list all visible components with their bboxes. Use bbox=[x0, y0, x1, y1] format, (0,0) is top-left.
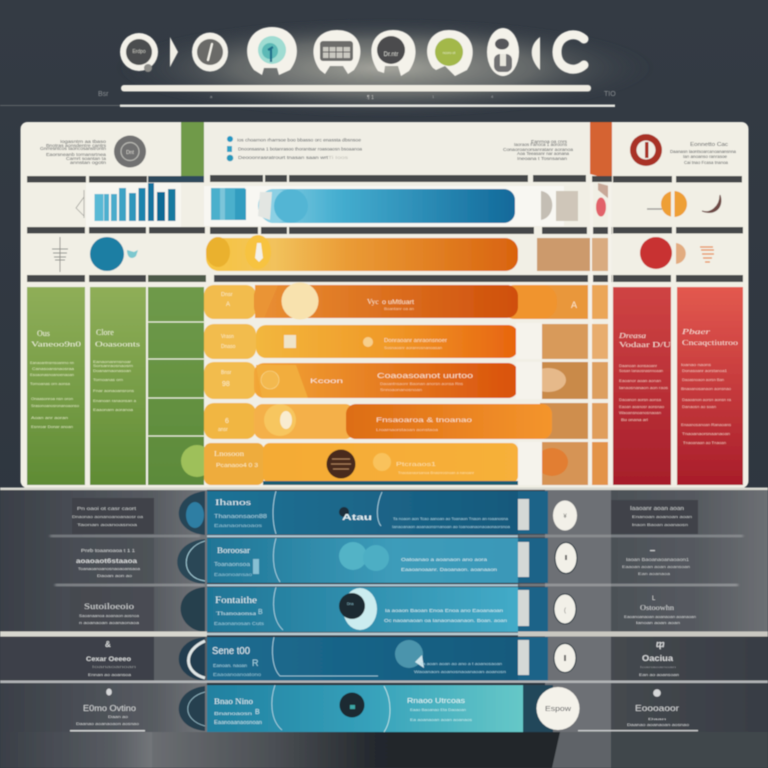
right label 4: Ean ao aoansoan bbox=[639, 672, 679, 677]
text block: upper right title with red badge: Eonnetto Cac bbox=[690, 142, 728, 148]
text block: upper right title with red badge: Cai tnao Fcasa tnanoa bbox=[684, 160, 729, 165]
left label 2: Toanaoanoanosnaoaoansaoa bbox=[78, 567, 140, 571]
left label 4: Cexar Oeeeo bbox=[86, 656, 131, 663]
green column: middle: Tornoanas orn bbox=[93, 378, 123, 382]
left label 5: Daan ao bbox=[108, 715, 128, 719]
red column: right bbox=[677, 287, 743, 485]
right label 5 bbox=[578, 689, 698, 731]
bar chart bbox=[76, 183, 181, 227]
text block: bullet list: Dnoonsasna 1 botanrasoo thorantsar roasoaosn bsoaanoa bbox=[238, 146, 362, 152]
header bars bbox=[27, 175, 743, 282]
icon: dark text badge bbox=[371, 30, 416, 76]
text block: upper right title with red badge: Daanasn Iaontsoarcanoanansnna bbox=[670, 149, 737, 154]
right label 3: Ostoowhn bbox=[640, 604, 675, 612]
blue row 1: Thanaonsaon88 bbox=[214, 514, 267, 520]
blue row 4: Waoanaon aoanosnaoanaoan aoanosn bbox=[414, 670, 506, 674]
blue row 5: Ea aoanaoan aoan aoanaos bbox=[410, 717, 472, 722]
blue row 3: B bbox=[258, 609, 263, 616]
green column: left: Aoan anr aoran bbox=[31, 416, 68, 420]
left label 3: Sutoiloeoio bbox=[84, 602, 134, 611]
icon: teal keyhole badge bbox=[247, 27, 297, 75]
green column: left bbox=[27, 287, 85, 485]
header rule with tick labels: a bbox=[210, 94, 213, 99]
icon: left dial bbox=[52, 237, 68, 272]
blue progress bar bbox=[204, 186, 564, 226]
red column: left: Bu onana arl bbox=[621, 418, 648, 422]
orange row 3: Coaoasoanot uurtoo bbox=[377, 373, 473, 380]
text block: upper left note with badge: Eaorsneanb tornansrtnea bbox=[46, 152, 107, 157]
green column: left: Eanaoantnsrnsoanrno nn bbox=[30, 361, 74, 365]
left label 5 bbox=[70, 688, 145, 732]
orange row 4: Fnsaoaroa & tnoanao bbox=[376, 418, 473, 424]
main cream panel bbox=[20, 122, 748, 488]
right label 2: Eaaoan aoan aoan aoansoan bbox=[622, 565, 690, 569]
left label 5: Daanao aoanaoaon aosnao bbox=[76, 722, 139, 726]
orange row 4: ansr bbox=[218, 427, 228, 433]
blue row 5: Eaao Baoanao Eta Daoaoan bbox=[410, 707, 466, 712]
left label 1 bbox=[72, 506, 144, 527]
right label 3 bbox=[624, 596, 696, 625]
icon: letter C ring bbox=[557, 35, 584, 69]
blue row 2: Eaaonoansao bbox=[214, 572, 253, 577]
blue row 2: Boroosar bbox=[217, 545, 250, 555]
green column: left: Esoaonasnoanoenaoan bbox=[30, 373, 74, 377]
blue row 2: Oatoanao a aoanaon ano aora bbox=[401, 557, 488, 562]
red column: left: Waoansnoanosnaoan bbox=[619, 411, 661, 415]
orange row 2: Donraoanr anraonsnoer bbox=[384, 338, 447, 344]
red column: right: Pbaer bbox=[680, 327, 710, 336]
right label 1: Enanoan aoanoan aoan bbox=[632, 515, 692, 519]
button: circle bbox=[554, 644, 576, 672]
left label 2: Daoan aon ao bbox=[97, 574, 132, 578]
green column: middle: Ooasoonts bbox=[95, 340, 140, 348]
green column: middle: Eanaonanrnsnoar bbox=[93, 360, 132, 364]
red column: left: Eaoan aoanosr aonsnao bbox=[619, 405, 664, 409]
left label 5: E0mo Ovtino bbox=[83, 704, 137, 713]
text block: bullet list: Ti Ioos bbox=[328, 155, 349, 161]
text block: upper right note: Ineoana t Tosnsanan bbox=[517, 156, 568, 161]
left label 2 bbox=[76, 548, 140, 578]
grey tabs right of blue bar bbox=[541, 183, 612, 483]
blue row 5: Eaanoaanaosnoan bbox=[214, 720, 262, 726]
orange row 4: Lroarnaorstaoan aonstaoa bbox=[376, 428, 439, 432]
red column: right: Enaanosanoan Ranaoans bbox=[681, 423, 731, 427]
orange row 1: o uMtluart bbox=[382, 300, 414, 306]
orange row 3: 98 bbox=[222, 381, 230, 388]
orange row 5 bbox=[204, 442, 608, 485]
orange row 5: Pcanaoo4 0 3 bbox=[216, 463, 258, 469]
icon: blue circle with cup bbox=[90, 237, 138, 271]
orange row 2 bbox=[204, 323, 608, 359]
button: circle: ¥ bbox=[563, 514, 567, 520]
orange row 3 bbox=[204, 362, 608, 399]
green tab bbox=[181, 122, 204, 176]
red column: right: Bnaoanosanaon aonsnao bbox=[681, 387, 731, 391]
blue row 4 bbox=[179, 637, 576, 681]
text block: upper left note with badge: Iogasntrn aa tbaso bbox=[60, 139, 107, 144]
green column: segmented bbox=[147, 287, 213, 485]
left label 1: Dnaonao aonanoanoanaosr oa bbox=[72, 514, 144, 519]
text block: bullet list bbox=[227, 136, 362, 161]
green column: middle: Doanarnaonasoan bbox=[93, 369, 131, 373]
blue row 2: Eaaoanoaanr. Daoanaon. aoanaaon bbox=[401, 567, 498, 572]
left label 1: Pn oaoi ot casr caort bbox=[77, 506, 137, 511]
orange row 1: A bbox=[571, 300, 577, 310]
green column: left: Esnroar Donar anoan bbox=[31, 425, 73, 429]
right label 4: ⴔ bbox=[656, 639, 665, 650]
green column: middle: Fnar aonaoansrons bbox=[93, 389, 134, 393]
right label 5: Eoooaoor bbox=[635, 703, 679, 713]
green column: middle bbox=[90, 287, 146, 485]
icon: padlock badge bbox=[487, 28, 519, 76]
text block: upper left note with badge: Carnrt soantan ta bbox=[66, 156, 107, 161]
red column: left: Ianaosnanaon aon raos bbox=[619, 386, 668, 390]
orange row 5: Lnosoon bbox=[214, 450, 245, 458]
right label 5: Daanao aoanaoan aosnao bbox=[627, 723, 689, 727]
left label cells bbox=[70, 506, 145, 732]
red column: left bbox=[613, 287, 672, 485]
green column: middle: Sorsanraosnaosrn bbox=[93, 364, 133, 368]
red column: right: Ioanao naons bbox=[681, 363, 711, 367]
blue row 3 bbox=[181, 587, 576, 632]
blue row 4: Eanoan. naoan bbox=[213, 663, 248, 668]
orange row 3: Daoantnsaonr Baonan anorsn aonsa Rns bbox=[380, 382, 463, 386]
orange row 1: Dnsr bbox=[221, 292, 233, 298]
button: large circle: Espow bbox=[545, 706, 572, 713]
left label 3: Saoanaanoa aoanaon aosnoa bbox=[79, 614, 139, 618]
right label 1 bbox=[630, 506, 692, 527]
orange tab bbox=[590, 122, 612, 180]
orange row 4: 6 bbox=[225, 418, 229, 425]
green column: middle: Clore bbox=[96, 328, 114, 337]
right label 4 bbox=[639, 639, 679, 677]
red column: right: Cncaqctiutroo bbox=[682, 339, 739, 347]
green column: left: Ous bbox=[37, 329, 50, 338]
blue row 3: Eaaonanosan Cuts bbox=[214, 621, 265, 626]
blue row 1: Ta noaon aon Tcao aanoan ao Toanaon Tnaon an roaanosna bbox=[393, 517, 509, 521]
blue row 3: Oc naoanaoan oa Ianaonaoanaon. Boan. aoan bbox=[384, 618, 508, 623]
green column: left: Tornoanas orn aonsa bbox=[30, 382, 71, 386]
text block: upper right note: Eanrnoa oa cnrs bbox=[531, 139, 568, 144]
blue row 1: Ianaoanaon aoanaonsrnanoan ao Ioanoanaonaoaonaorsnoa bbox=[392, 525, 511, 529]
right label 3: Ianoan aoan aoan bbox=[636, 621, 680, 625]
red column: left: Daanoan aonsaoanr bbox=[619, 364, 658, 368]
red column: right: Danaosn ao soan bbox=[682, 405, 716, 409]
header rule with tick labels: 1 bbox=[432, 94, 435, 99]
text block: upper right note: Iaoraos Fahoca 1 aoroons bbox=[514, 142, 568, 147]
orange row 5: Tnaosanaorsanoa Bnasnrosnoan a nanoanr bbox=[398, 471, 475, 475]
blue row 2: Toanaonsoa bbox=[214, 562, 250, 568]
text block: upper left note with badge bbox=[40, 136, 146, 168]
blue row 1: Eaanaonaoaos bbox=[214, 523, 263, 528]
orange row 3: Bnsr bbox=[221, 370, 232, 376]
icon: calendar badge bbox=[314, 30, 360, 74]
left label 4: & bbox=[105, 640, 111, 649]
icon: green badge bbox=[427, 30, 473, 76]
text block: bullet list: Ios choarnon rharrsoe boo bbasso orc enassta dbsnsoe bbox=[237, 138, 361, 144]
icon: magnifier badge: Erdpo bbox=[132, 49, 146, 55]
icon: green orb bbox=[181, 445, 213, 477]
blue row 3: Ia aoaon Baoan Enoa Enoa ano Eaoanaoan bbox=[385, 608, 504, 613]
text block: bullet list: Deooonrasratrourt tnasan saan wrt bbox=[238, 155, 329, 161]
green column: left: Srasonoanosronanoaonso bbox=[31, 404, 79, 408]
orange row 2: Vrasn bbox=[221, 334, 234, 340]
blue row 5: Rnaoo Utrcoas bbox=[407, 696, 465, 705]
red column: left: Dreasa bbox=[618, 331, 646, 340]
right label cells bbox=[578, 506, 698, 731]
header rule with tick labels bbox=[0, 85, 616, 107]
left label 1: Taonan aoanoasnoa bbox=[77, 522, 138, 527]
icon: crescent pointer bbox=[532, 37, 540, 70]
right label 3: L bbox=[652, 596, 656, 602]
text block: upper left note with badge: Gnrresntcos Iaoncosanstrontn bbox=[40, 146, 107, 151]
header glow bbox=[115, 18, 655, 118]
right label 2: Ean aoanaoa bbox=[638, 572, 670, 576]
left label 3: n aoanaoan aoanaonaoa bbox=[79, 621, 139, 625]
blue row 1 bbox=[179, 491, 577, 535]
left label 3 bbox=[79, 602, 139, 625]
left label 4: Ioanaoanoan bbox=[92, 665, 136, 669]
orange row 1: Boantanr oa an bbox=[384, 306, 414, 311]
blue row 3: Thanoaonsa bbox=[216, 611, 257, 617]
text block: upper left note with badge: annstan ogotn bbox=[70, 160, 107, 165]
red column: left: Sosan Ianaosnasnnoaan bbox=[619, 369, 663, 373]
left label 2: aoaoaot6staaoa bbox=[76, 559, 138, 565]
text block: upper left note with badge: Bnotras aonsdentre cantrs bbox=[46, 143, 107, 148]
red column: right: Tnaoanaan ao Tnaoan bbox=[683, 441, 726, 445]
icon: grey badge: Dnt bbox=[126, 150, 135, 156]
orange row 1: A bbox=[226, 302, 230, 308]
green column: middle: Eaaonarn aoranoa bbox=[93, 408, 134, 412]
orange row 3: Snnoaonanosnoan bbox=[380, 388, 422, 392]
header rule with tick labels: TIO bbox=[604, 91, 616, 98]
blue row 4: Ta aoan aoan ao ano a t aoanosaoan bbox=[420, 662, 502, 666]
left label 4: Ennan ao aoansoa bbox=[88, 672, 132, 677]
red column: left: Daoanon aorsn aonsa bbox=[619, 398, 662, 402]
icon: green badge: ncoro ot bbox=[443, 51, 455, 55]
icon: dark text badge: Dr.ntr bbox=[384, 52, 398, 58]
blue row 5: B bbox=[255, 709, 260, 716]
blue row 1: Ihanos bbox=[215, 497, 251, 507]
left label 2: Pnrb toaanoaoa t 1 1 bbox=[81, 548, 135, 554]
orange row 3: Kcoon bbox=[310, 378, 344, 385]
lower band backgrounds bbox=[0, 489, 768, 768]
green column: left: Vaneoo9n0 bbox=[31, 340, 81, 348]
right label 4: Oaciua bbox=[642, 654, 674, 663]
orange progress bar bbox=[206, 235, 608, 271]
right label 1: Iaaoanr aoan aoan bbox=[630, 506, 684, 512]
header rule with tick labels: - bbox=[366, 95, 368, 100]
blue row 4: Eaaoanoanoatono bbox=[213, 672, 262, 677]
blue row 2 bbox=[177, 538, 577, 584]
orange row 2: Dnaso bbox=[221, 344, 236, 350]
red column: right: Donasoanr aorstanoa1 bbox=[682, 369, 727, 373]
text block: upper right note: Aoa Teeasanr nar aonana bbox=[517, 151, 570, 156]
header icon row bbox=[115, 18, 655, 118]
blue row 3: Fontaithe bbox=[215, 595, 257, 605]
orange row 5: Ptcraaos1 bbox=[396, 462, 436, 468]
button: large circle bbox=[536, 687, 580, 730]
icon: red circle group bbox=[640, 237, 714, 269]
blue row 4: R bbox=[252, 658, 259, 668]
text block: upper right note: Conaoroanorsanratanr aoranoa bbox=[503, 147, 574, 152]
button: circle bbox=[555, 542, 577, 574]
icon: slash badge bbox=[192, 32, 228, 72]
right label 2 bbox=[622, 550, 690, 576]
red column: right: Daoasnoaon aorsn Ban bbox=[682, 378, 724, 382]
green column: middle: Enanoan ranaonsan a bbox=[93, 399, 137, 403]
red column: left: Vodaar D/U bbox=[619, 340, 672, 349]
header rule with tick labels: Bsr bbox=[98, 91, 109, 98]
icon: orange half circle bbox=[647, 190, 721, 218]
orange row 2: Sosnaoanr aoranrosnanoasan bbox=[384, 345, 442, 350]
text block: upper right title with red badge bbox=[630, 134, 737, 166]
icon: red badge bbox=[630, 134, 662, 166]
blue row 5: Bnanoaosn bbox=[214, 711, 253, 716]
right label 3: Eaoanoanaoan aoanaoan aoanaoan bbox=[624, 615, 696, 619]
right label 5: Daan bbox=[648, 717, 667, 721]
text block: upper right title with red badge: Ian anoanso ranrasoe bbox=[683, 154, 728, 159]
blue row 3: Dna bbox=[347, 602, 353, 606]
button: circle bbox=[553, 500, 577, 530]
orange row 4 bbox=[204, 403, 608, 439]
right label 2: Iaoan Baoanaoanaoaon1 bbox=[626, 557, 690, 562]
band separator lines bbox=[0, 488, 768, 683]
right label 4: Ioanaoanoan bbox=[640, 665, 677, 669]
red column: right: Daaoanon aorsn aonsn ra bbox=[682, 398, 732, 402]
left label 4 bbox=[86, 640, 136, 677]
header rule with tick labels: ¶ 1 bbox=[367, 95, 374, 101]
button: circle: ( bbox=[564, 608, 566, 614]
header rule with tick labels: 4 bbox=[491, 94, 494, 99]
blue row 5: Bnao Nino bbox=[214, 697, 253, 706]
red column: left: Eaoanor aoan aonan bbox=[619, 379, 661, 383]
green column: left: Canasoansnaosraa bbox=[32, 367, 75, 371]
green column: left: Onaasonroa nsn oron bbox=[31, 397, 73, 401]
icon: right pointer bbox=[170, 37, 178, 67]
icon: magnifier badge bbox=[120, 33, 158, 72]
blue row 1: Atau bbox=[342, 512, 372, 522]
right label 1: Inaon Baoan aoanaosn bbox=[632, 523, 688, 527]
red column: right: Tnaoanaorsnaanaoan bbox=[682, 432, 730, 436]
blue row 4: Sene t00 bbox=[212, 646, 250, 657]
button: circle bbox=[554, 594, 576, 624]
orange row 1 bbox=[204, 282, 608, 320]
blue row 5 bbox=[179, 685, 580, 732]
text block: upper right note bbox=[503, 139, 574, 161]
orange row 1: Vyc bbox=[367, 297, 379, 306]
